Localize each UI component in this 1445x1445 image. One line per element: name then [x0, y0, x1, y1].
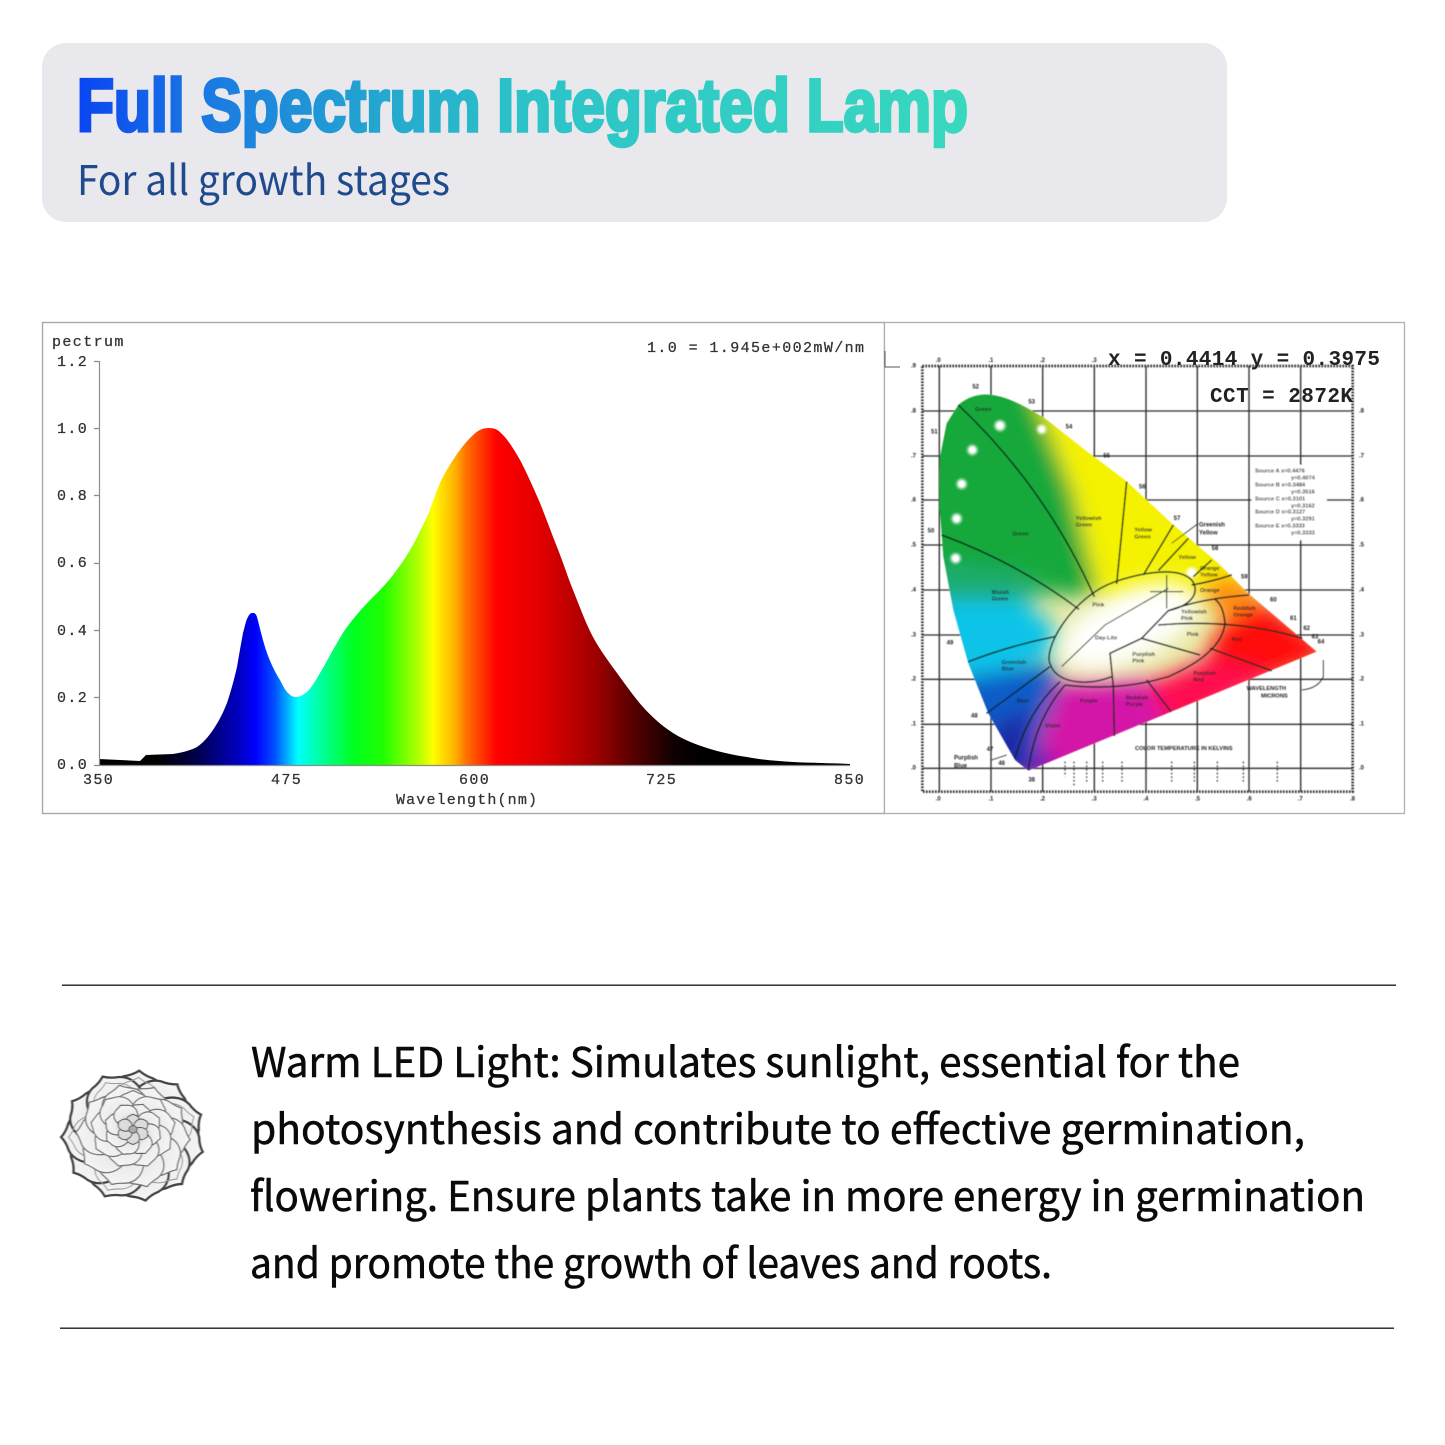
axis tick values: .0: [911, 766, 917, 772]
wavelength labels: 57: [1174, 516, 1181, 522]
axis tick values: .1: [988, 797, 994, 803]
axis tick values: .0: [1359, 766, 1365, 772]
callouts: Purplish: [954, 755, 978, 761]
x axis labels: 850: [834, 772, 865, 789]
divider top: [62, 984, 1396, 986]
region labels: Green: [1076, 523, 1093, 529]
wavelength labels: 56: [1139, 485, 1146, 491]
region labels: Yellow: [1134, 528, 1153, 534]
title: Full Spectrum Integrated Lamp: [77, 64, 968, 147]
source legend: y=0.3516: [1291, 489, 1315, 495]
axis tick values: .2: [1040, 797, 1046, 803]
axis tick values: .0: [936, 358, 941, 364]
region labels: Orange: [1200, 588, 1220, 594]
header panel: [42, 43, 1227, 222]
source legend: y=0.4074: [1291, 476, 1316, 482]
callouts: WAVELENGTH: [1247, 686, 1286, 692]
source legend: Source C x=0.3101: [1255, 496, 1305, 502]
source legend: y=0.3162: [1291, 503, 1315, 509]
axis tick values: .7: [1298, 797, 1303, 803]
callouts: COLOR TEMPERATURE IN KELVINS: [1135, 746, 1233, 752]
icon: succulent plant: [57, 1066, 210, 1207]
region labels: [975, 407, 1256, 730]
region labels: Pink: [1181, 616, 1194, 622]
x axis labels: 350: [83, 772, 114, 789]
wavelength labels: 59: [1241, 574, 1248, 580]
y axis labels: 0.6: [57, 555, 88, 572]
region labels: Blue: [1017, 699, 1029, 705]
wavelength labels: 51: [931, 429, 938, 435]
axis tick values: .5: [1359, 542, 1365, 548]
coordinates readout: x = 0.4414 y = 0.3975: [1108, 349, 1380, 372]
grid clear for legend: [1252, 465, 1327, 540]
wavelength labels: 60: [1270, 598, 1277, 604]
region labels: Blue: [1002, 667, 1014, 673]
axis tick values: .8: [1350, 797, 1356, 803]
region labels: Pink: [1187, 632, 1199, 638]
axis tick values: .3: [911, 632, 917, 638]
wavelength labels: 38: [1028, 778, 1036, 784]
axis tick values: .6: [911, 497, 917, 503]
axis tick values: .6: [1359, 497, 1365, 503]
colour temperature scale: [1065, 762, 1277, 787]
region labels: Green: [1012, 532, 1029, 538]
source legend: Source B x=0.3484: [1255, 482, 1306, 488]
wavelength labels: 48: [971, 713, 978, 719]
source legend: Source A x=0.4476: [1255, 469, 1305, 475]
region labels: Violet: [1045, 724, 1060, 730]
region labels: Orange: [1200, 566, 1220, 572]
axis tick values: .5: [911, 542, 917, 548]
region labels: Red: [1232, 637, 1243, 643]
axis tick values: .2: [1359, 677, 1365, 683]
spectrum header text: pectrum: [52, 334, 125, 351]
region labels: Yellowish: [1181, 609, 1207, 615]
wavelength labels: 61: [1290, 616, 1297, 622]
power scale note: 1.0 = 1.945e+002mW/nm: [647, 340, 865, 357]
callouts: Greenish: [1199, 523, 1225, 529]
region labels: Pink: [1092, 603, 1105, 609]
wavelength labels: 53: [1028, 399, 1036, 405]
body text: [250, 1029, 1365, 1290]
region labels: Green: [975, 407, 992, 413]
wavelength labels: 47: [987, 747, 994, 753]
wavelength labels: 52: [972, 385, 980, 391]
axis tick values: .1: [988, 358, 994, 364]
region labels: Purplish: [1193, 671, 1217, 677]
chart grid: [922, 366, 1353, 792]
wavelength labels: 46: [998, 761, 1006, 767]
region labels: Purple: [1126, 702, 1143, 708]
region labels: Bluish: [992, 590, 1009, 596]
white led dots: [951, 420, 1197, 578]
x axis labels: 725: [646, 772, 677, 789]
axis tick values: .2: [1040, 358, 1046, 364]
axis tick values: .8: [1359, 408, 1365, 414]
region labels: Reddish: [1233, 606, 1256, 612]
y axis labels: 0.2: [57, 690, 88, 707]
source legend: Source E x=0.3333: [1255, 524, 1305, 530]
axis tick values: .7: [1359, 453, 1365, 459]
body text: photosynthesis and contribute to effective germination,: [251, 1096, 1305, 1156]
y axis labels: [57, 354, 88, 774]
panel: chromaticity diagram: [884, 322, 1404, 814]
axis tick values: .2: [911, 677, 917, 683]
axis tick values: .5: [1195, 797, 1201, 803]
y axis labels: 0.0: [57, 757, 88, 774]
body text: flowering. Ensure plants take in more energy in germination: [250, 1163, 1365, 1223]
panel: spectrum chart: [42, 322, 884, 814]
axis tick values: .3: [1092, 358, 1097, 364]
region labels: Green: [1134, 534, 1151, 540]
wavelength labels: 64: [1318, 639, 1325, 645]
spectrum curve: [99, 428, 850, 765]
source legend: y=0.3291: [1291, 517, 1315, 523]
axis tick values: .1: [1359, 722, 1365, 728]
axis tick values: .3: [1359, 632, 1365, 638]
subtitle: For all growth stages: [77, 147, 450, 207]
y axis labels: 1.0: [57, 421, 88, 438]
region labels: Yellow: [1178, 555, 1197, 561]
correlated colour temperature: CCT = 2872K: [1210, 386, 1353, 409]
y axis labels: 0.8: [57, 488, 88, 505]
divider bottom: [60, 1328, 1394, 1329]
wavelength labels: 54: [1066, 424, 1073, 430]
region labels: Yellow: [1200, 573, 1218, 579]
colour region boundaries: [942, 405, 1302, 770]
colour gamut: [938, 394, 1317, 772]
body text: and promote the growth of leaves and roots.: [250, 1230, 1052, 1290]
region labels: Greenish: [1002, 660, 1027, 666]
x axis title: Wavelength(nm): [396, 792, 538, 809]
body text: Warm LED Light: Simulates sunlight, essential for the: [251, 1029, 1240, 1089]
region labels: Purple: [1080, 699, 1098, 705]
callouts: [954, 523, 1323, 770]
axes: [94, 361, 850, 766]
axis tick values: .7: [911, 453, 917, 459]
region labels: Green: [992, 597, 1009, 603]
wavelength labels: 55: [1103, 453, 1111, 459]
wavelength labels: 49: [947, 640, 954, 646]
x axis labels: 600: [459, 772, 490, 789]
axis tick values: .0: [936, 797, 941, 803]
wavelength labels: 62: [1303, 626, 1311, 632]
callouts: Blue: [954, 764, 968, 770]
y axis labels: 1.2: [57, 354, 88, 371]
region labels: Purplish: [1132, 652, 1156, 658]
region labels: Yellowish: [1076, 516, 1102, 522]
axis tick values: .3: [1092, 797, 1097, 803]
axis tick values: .9: [911, 363, 917, 369]
region labels: Day-Lite: [1095, 635, 1117, 641]
wavelength labels: 58: [1212, 546, 1219, 552]
axis tick values: .4: [1359, 587, 1365, 593]
axis tick values: .4: [911, 587, 917, 593]
wavelength labels: [928, 385, 1325, 784]
y axis labels: 0.4: [57, 623, 88, 640]
source legend: Source D x=0.3127: [1255, 510, 1305, 516]
region labels: Reddish: [1126, 695, 1149, 701]
callouts: Yellow: [1199, 531, 1218, 537]
source legend: y=0.3333: [1291, 531, 1315, 537]
region labels: Red: [1193, 678, 1205, 684]
wavelength labels: 50: [928, 528, 935, 534]
region labels: Pink: [1132, 659, 1145, 665]
x axis labels: [83, 772, 865, 789]
region labels: Orange: [1233, 613, 1253, 619]
axis tick values: .8: [911, 408, 917, 414]
axis tick values: .1: [911, 722, 917, 728]
callouts: MICRONS: [1261, 694, 1288, 700]
axis tick values: .6: [1247, 797, 1252, 803]
axis tick values: .4: [1143, 797, 1149, 803]
wavelength labels: 63: [1312, 634, 1319, 640]
source legend: [1255, 469, 1316, 537]
axis tick values: [911, 358, 1365, 803]
x axis labels: 475: [271, 772, 302, 789]
